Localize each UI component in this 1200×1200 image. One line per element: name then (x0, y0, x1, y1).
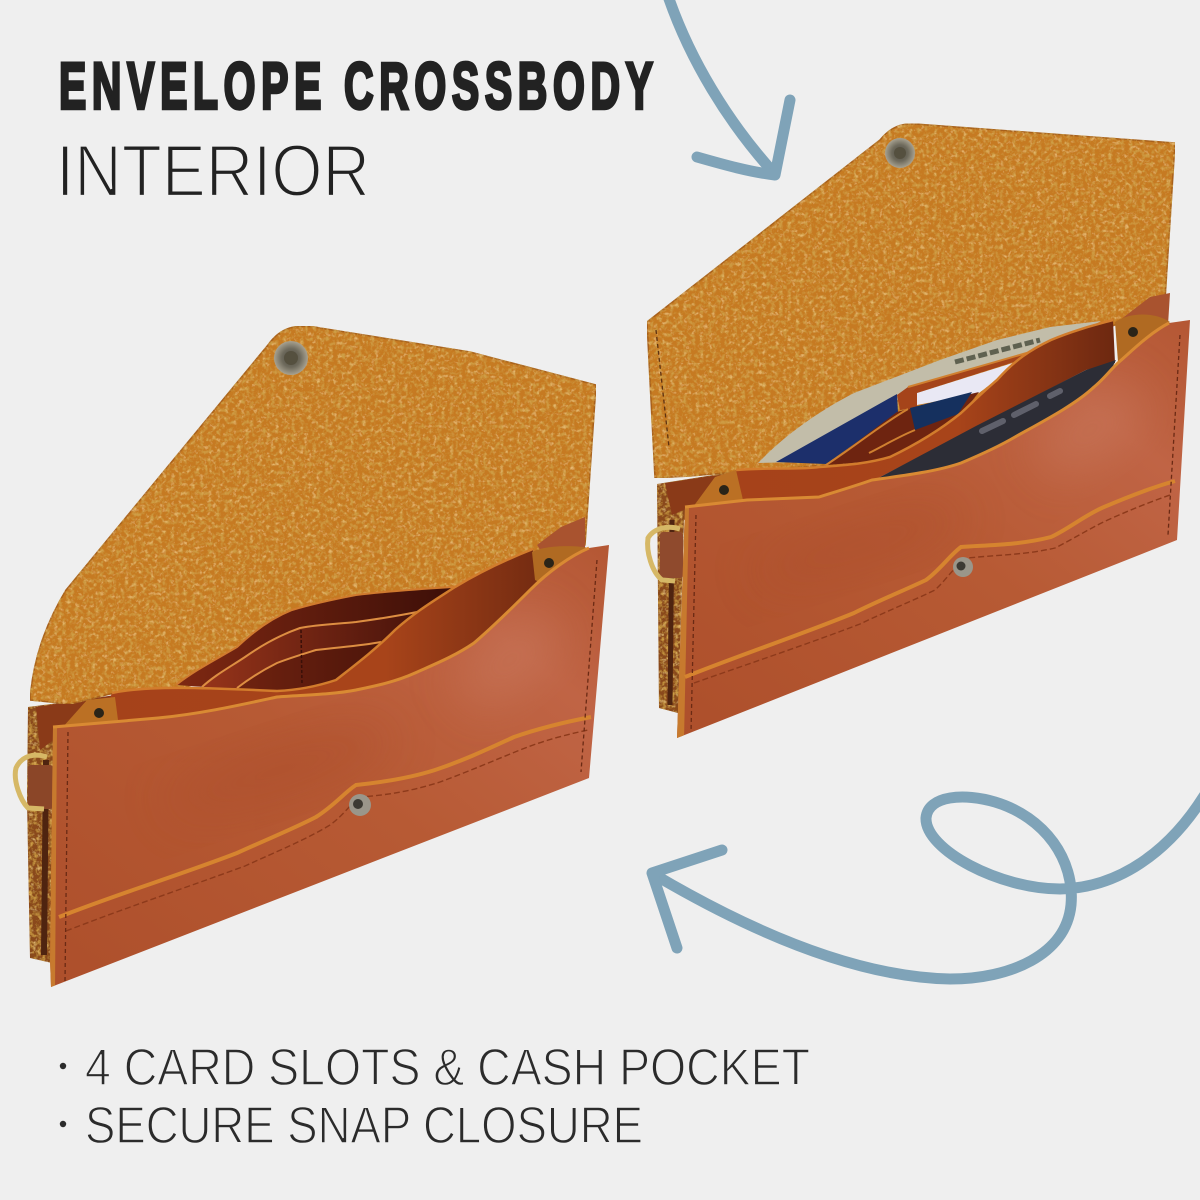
title (56, 48, 653, 212)
bullet one: 4 CARD SLOTS & CASH POCKET (85, 1039, 810, 1097)
left wallet: side stitching (65, 560, 597, 982)
left wallet: rear tab (537, 517, 585, 565)
right wallet: pocket stitched edge (736, 320, 1113, 470)
left wallet: pocket snap (349, 794, 371, 816)
left wallet: lower pocket flap (59, 717, 591, 917)
right wallet: flap snap (885, 138, 915, 168)
right wallet: cash (758, 321, 1101, 463)
right wallet: front panel (677, 320, 1190, 738)
left wallet: lower pocket stitching (66, 730, 588, 931)
title: ENVELOPE CROSSBODY (59, 48, 653, 123)
left wallet: leather highlights (48, 600, 574, 990)
arrow: looped lower arrow (652, 796, 1200, 979)
right wallet: rear tab (1120, 293, 1170, 335)
right wallet (647, 124, 1190, 740)
right wallet: lower pocket flap (685, 481, 1175, 677)
bullet two: SECURE SNAP CLOSURE (85, 1097, 643, 1155)
left wallet: front top edge (53, 548, 589, 727)
right wallet: pocket snap (953, 557, 973, 577)
left wallet: flap snap (274, 341, 308, 375)
right wallet: card slot panels (826, 348, 1044, 465)
right wallet: side rivet tabs (693, 314, 1170, 507)
right wallet: front top edge (685, 323, 1169, 507)
left wallet: side rivet tabs (62, 546, 589, 728)
left wallet: pocket stitched edge (112, 549, 533, 693)
left wallet: inner pocket panel (100, 549, 560, 725)
left wallet: suede flap (30, 326, 596, 704)
right wallet: leather highlights (676, 373, 1155, 740)
right wallet: blue card (776, 394, 898, 464)
right wallet: lower pocket stitching (694, 495, 1170, 683)
feature list (60, 1039, 810, 1155)
left wallet: rear gusset (27, 695, 120, 963)
arrow: top curved arrow (668, 0, 790, 175)
right wallet: suede flap (647, 124, 1175, 478)
right wallet: phone (850, 360, 1116, 492)
right wallet: white card (917, 360, 1022, 405)
right wallet: rear gusset (657, 470, 745, 713)
left wallet: card slots (176, 587, 453, 692)
right wallet: flap stitching (656, 330, 669, 447)
right wallet: inner pocket panel (700, 320, 1115, 510)
title: INTERIOR (56, 131, 370, 212)
right wallet: brass ring and strap (648, 527, 683, 581)
left wallet: front panel (50, 545, 609, 987)
right wallet: side stitching (691, 335, 1180, 732)
left wallet: brass ring and strap (15, 755, 53, 809)
left wallet (15, 326, 609, 990)
